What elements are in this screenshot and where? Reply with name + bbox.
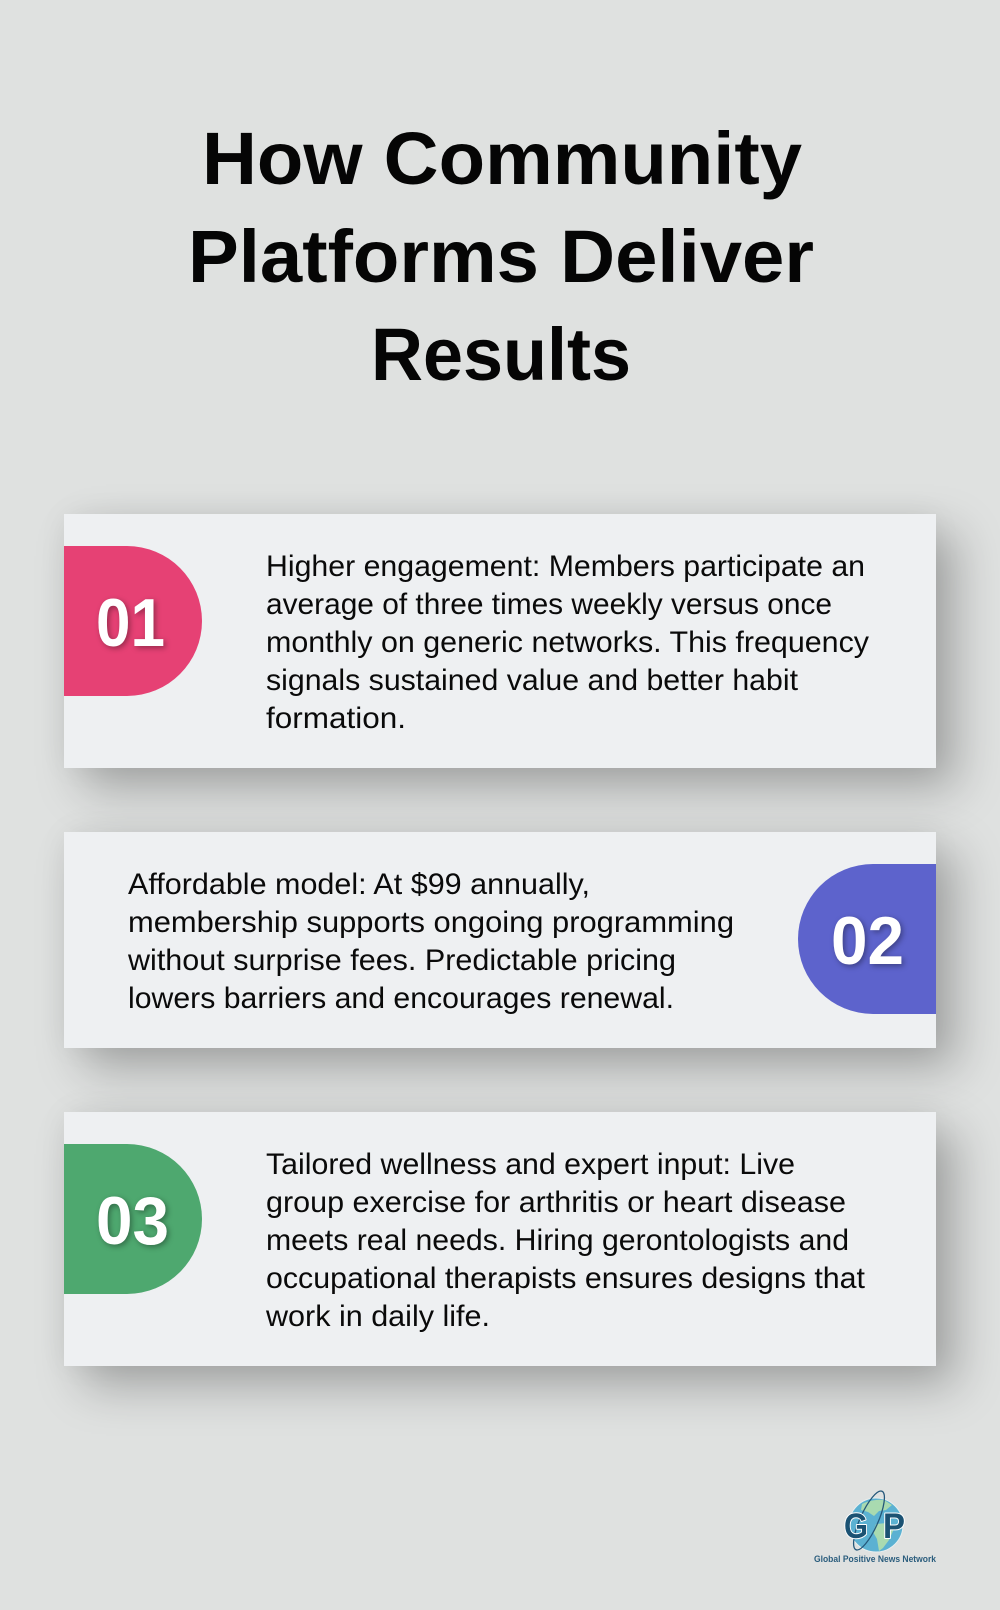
- panel: card 01 higher engagement: [64, 514, 936, 768]
- icon: globe with orbit: [848, 1488, 903, 1553]
- panel: card 02 affordable model: [64, 832, 936, 1048]
- text block: higher engagement: formation.: [266, 702, 406, 735]
- logo wordmark: Global Positive News Network: [814, 1554, 937, 1564]
- logo letters G and P: [844, 1507, 905, 1546]
- text block: affordable model: without surprise fees. Predictable pricing: [127, 944, 676, 977]
- text block: higher engagement: average of three times weekly versus once: [266, 588, 832, 621]
- text block: tailored wellness: group exercise for arthritis or heart disease: [266, 1186, 846, 1219]
- text block: tailored wellness: occupational therapists ensures designs that: [266, 1262, 865, 1295]
- title: Results: [371, 313, 631, 396]
- number 01: 01: [96, 585, 165, 661]
- text block: affordable model: lowers barriers and encourages renewal.: [128, 982, 674, 1015]
- panel: card 03 tailored wellness: [64, 1112, 936, 1366]
- number 02: 02: [831, 903, 904, 979]
- text block: tailored wellness: work in daily life.: [265, 1300, 490, 1333]
- title: Platforms Deliver: [188, 215, 814, 298]
- logo letters G and P: G: [844, 1507, 868, 1546]
- text block: tailored wellness: meets real needs. Hiring gerontologists and: [266, 1224, 849, 1257]
- text block: higher engagement: [266, 550, 869, 735]
- text block: higher engagement: monthly on generic networks. This frequency: [266, 626, 869, 659]
- text block: tailored wellness: [265, 1148, 865, 1333]
- text block: higher engagement: Higher engagement: Members participate an: [266, 550, 865, 583]
- badge 03: [64, 1144, 202, 1294]
- text block: affordable model: membership supports ongoing programming: [128, 906, 734, 939]
- badge 01: [64, 546, 202, 696]
- text block: affordable model: Affordable model: At $99 annually,: [128, 868, 590, 901]
- text block: tailored wellness: Tailored wellness and expert input: Live: [266, 1148, 795, 1181]
- text block: higher engagement: signals sustained value and better habit: [266, 664, 798, 697]
- title: How Community: [202, 117, 802, 200]
- logo letters G and P: P: [883, 1507, 905, 1546]
- title: [188, 117, 814, 396]
- badge 02: [798, 864, 936, 1014]
- number 03: 03: [96, 1183, 169, 1259]
- text block: affordable model: [127, 868, 734, 1015]
